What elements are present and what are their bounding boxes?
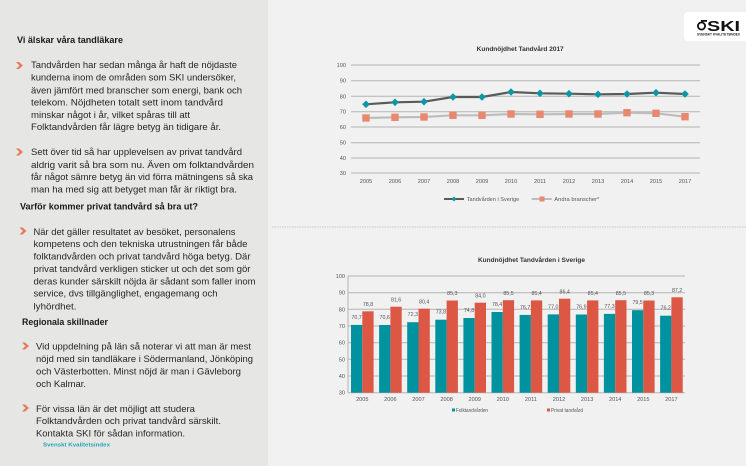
chart: bar chart Kundnöjdhet Tandvården i Sverige — [336, 257, 685, 414]
heading: Regionala skillnader: Regionala skillnader — [22, 317, 108, 327]
x axis labels: 2007 — [418, 179, 430, 185]
footer: Svenskt Kvalitetsindex: Svenskt Kvalitetsindex — [43, 443, 111, 449]
y axis labels: 90 — [340, 79, 346, 85]
value labels: Folktandvården: 76,7 — [520, 305, 530, 311]
series: Tandvården i Sverige — [362, 88, 689, 108]
text block: tandvården: minskar något i år, vilket spåras till att — [31, 110, 190, 120]
text block: resultatet: folktandvården och privat tandvård höga betyg. Där — [34, 252, 250, 262]
value labels: Folktandvården: 72,3 — [408, 312, 418, 318]
value labels: Privat tandvård: 80,4 — [419, 299, 429, 305]
y axis labels: 80 — [340, 94, 346, 100]
icon: bullet chevron 1 — [16, 62, 23, 69]
legend: Folktandvården — [456, 407, 488, 414]
value labels: Privat tandvård: 85,3 — [447, 291, 458, 297]
chart title: Kundnöjdhet Tandvården i Sverige — [478, 257, 586, 264]
legend: Privat tandvård — [551, 407, 583, 414]
value labels: Folktandvården: 73,8 — [436, 310, 446, 316]
text block: privat tandvård: Sett över tid så har upplevelsen av privat tandvård — [31, 147, 242, 157]
text block: vissa län: För vissa län är det möjligt att studera — [36, 404, 196, 414]
text block: privat tandvård: får något sämre betyg än vid förra mätningens så ska — [31, 172, 254, 182]
value labels: Folktandvården: 77,3 — [604, 304, 615, 310]
y axis labels — [336, 274, 345, 397]
text block: resultatet: När det gäller resultatet av besöket, personalens — [34, 227, 236, 237]
value labels: Privat tandvård: 81,6 — [391, 297, 401, 303]
x axis labels: 2007 — [412, 397, 425, 403]
y axis labels: 40 — [340, 156, 346, 162]
y axis labels: 30 — [339, 391, 345, 397]
x axis labels: 2008 — [440, 397, 453, 403]
legend — [444, 196, 600, 203]
x axis labels: 2017 — [679, 179, 691, 185]
value labels: Folktandvården: 70,7 — [351, 315, 362, 321]
icon: bullet chevron 3 — [20, 228, 26, 234]
y axis labels: 100 — [337, 63, 346, 69]
logo: SKI — [684, 12, 746, 41]
icon: bullet chevron 5 — [22, 404, 29, 412]
bars: Privat tandvård — [362, 297, 683, 393]
text block: tandvården: även jämfört med branscher som energi, bank och — [31, 85, 242, 95]
x axis labels: 2017 — [665, 397, 678, 403]
icon: bullet chevron 4 — [22, 342, 29, 350]
value labels: Privat tandvård: 86,4 — [560, 289, 570, 295]
y axis labels: 90 — [339, 291, 345, 297]
value labels: Privat tandvård: 87,2 — [672, 288, 682, 294]
heading: Varför kommer privat tandvård så bra ut?: Varför kommer privat tandvård så bra ut? — [20, 202, 198, 212]
value labels: Privat tandvård: 85,5 — [616, 291, 626, 297]
value labels: Folktandvården: 76,9 — [576, 304, 587, 310]
text block: vissa län: Folktandvården och privat tandvård särskilt. — [36, 416, 221, 426]
logo: SKI: SKI — [707, 19, 740, 35]
x axis labels: 2015 — [650, 179, 662, 185]
text block: län — [36, 342, 253, 389]
x axis labels: 2014 — [609, 397, 621, 403]
y axis labels: 60 — [340, 125, 346, 131]
value labels: Folktandvården: 74,8 — [464, 308, 474, 314]
x axis labels: 2012 — [553, 397, 565, 403]
text block: privat tandvård: man ha med sig att betyget man får är riktigt bra. — [31, 185, 237, 195]
y axis labels: 50 — [340, 141, 346, 147]
text block: tandvården — [31, 60, 242, 132]
text block: tandvården: telekom. Nöjdheten totalt sett inom tandvård — [31, 98, 223, 108]
text block: resultatet: lyhördhet. — [34, 302, 76, 312]
x axis labels: 2010 — [505, 179, 517, 185]
text block: län: och Kalmar. — [36, 379, 86, 389]
legend: Tandvården i Sverige — [467, 196, 519, 203]
y axis labels: 100 — [336, 274, 345, 280]
x axis labels: 2010 — [497, 397, 509, 403]
x axis labels: 2013 — [592, 179, 604, 185]
value labels: Folktandvården: 79,5 — [632, 300, 643, 306]
value labels: Privat tandvård: 85,5 — [503, 291, 514, 297]
heading: Vi älskar våra tandläkare: Vi älskar våra tandläkare — [17, 35, 123, 45]
y axis labels: 70 — [340, 110, 346, 116]
value labels: Privat tandvård: 85,4 — [588, 291, 598, 297]
x axis labels — [360, 179, 691, 185]
y axis labels: 70 — [339, 324, 345, 330]
x axis labels: 2005 — [360, 179, 372, 185]
x axis labels: 2011 — [534, 179, 546, 185]
x axis labels: 2005 — [356, 397, 369, 403]
x axis labels — [356, 397, 678, 403]
legend: Andra branscher* — [554, 197, 600, 203]
icon: bullet chevron 2 — [16, 148, 23, 156]
text block: resultatet: kompetens och den tekniska utrustningen får både — [34, 239, 248, 249]
y axis labels — [337, 63, 346, 177]
value labels: Privat tandvård: 85,4 — [531, 291, 542, 297]
value labels: Privat tandvård — [363, 288, 682, 308]
text block: län: och Västerbotten. Minst nöjd är man i Gävleborg — [36, 367, 241, 377]
y axis labels: 50 — [339, 357, 345, 363]
y axis labels: 40 — [339, 374, 345, 380]
y axis labels: 80 — [339, 307, 345, 313]
y axis labels: 60 — [339, 341, 345, 347]
series: Andra branscher — [362, 109, 689, 122]
chart title: Kundnöjdhet Tandvård 2017 — [477, 46, 564, 53]
x axis labels: 2009 — [476, 179, 488, 185]
value labels: Folktandvården: 78,4 — [492, 302, 502, 308]
x axis labels: 2013 — [581, 397, 593, 403]
chart: line chart Kundnöjdhet Tandvård 2017 — [337, 46, 700, 203]
x axis labels: 2011 — [525, 397, 537, 403]
x axis labels: 2015 — [637, 397, 650, 403]
text block: tandvården: Folktandvården får lägre betyg än tidigare år. — [31, 122, 221, 132]
text block: privat tandvård: aldrig varit så bra som nu. Även om folktandvården — [31, 160, 254, 170]
text block: resultatet: service, dvs tillgänglighet, engagemang och — [34, 289, 218, 299]
x axis labels: 2014 — [621, 179, 633, 185]
text block: tandvården: Tandvården har sedan många år haft de nöjdaste — [31, 60, 237, 70]
text block: resultatet — [34, 227, 256, 312]
text block: tandvården: kunderna inom de områden som SKI undersöker, — [31, 73, 236, 83]
value labels: Folktandvården — [351, 300, 671, 321]
value labels: Folktandvården: 70,6 — [380, 315, 390, 321]
text block: län: Vid uppdelning på län så noterar vi att man är mest — [36, 342, 251, 352]
x axis labels: 2008 — [447, 179, 459, 185]
text block: vissa län — [36, 404, 221, 439]
text block: privat tandvård — [31, 147, 254, 195]
text block: län: nöjd med sin tandläkare i Södermanland, Jönköping — [36, 354, 253, 364]
value labels: Folktandvården: 76,2 — [661, 306, 671, 312]
x axis labels: 2006 — [389, 179, 401, 185]
value labels: Privat tandvård: 84,0 — [475, 293, 486, 299]
x axis labels: 2012 — [563, 179, 575, 185]
value labels: Privat tandvård: 85,3 — [644, 291, 654, 297]
x axis labels: 2009 — [468, 397, 481, 403]
panel: left text column — [0, 0, 268, 466]
text block: resultatet: privat tandvård verkligen sticker ut och det som gör — [34, 264, 250, 274]
x axis labels: 2006 — [384, 397, 397, 403]
value labels: Privat tandvård: 78,8 — [363, 302, 373, 308]
text block: resultatet: deras kunder särskilt nöjda är sådant som faller inom — [34, 277, 256, 287]
legend — [452, 407, 583, 414]
y axis labels: 30 — [340, 171, 346, 177]
bars: Folktandvården — [351, 310, 671, 393]
logo: SKI: SVENSKT KVALITETSINDEX — [697, 32, 741, 36]
text block: vissa län: Kontakta SKI för sådan information. — [36, 429, 185, 439]
value labels: Folktandvården: 77,0 — [548, 304, 559, 310]
